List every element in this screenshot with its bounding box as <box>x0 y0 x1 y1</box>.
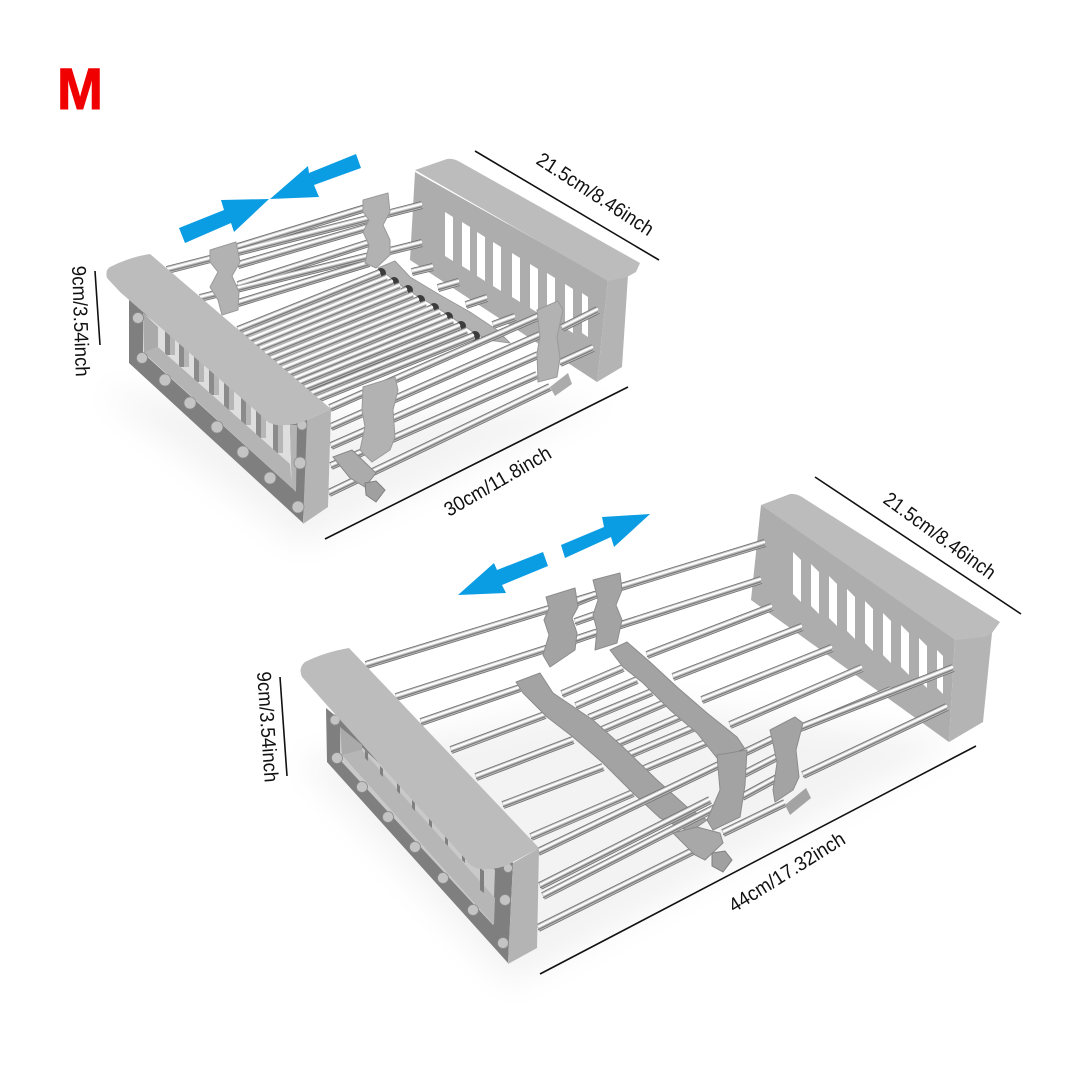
shadow under extended basket <box>300 700 960 985</box>
dimension: bottom height: 9cm/3.54inch <box>252 671 282 783</box>
rod stub <box>785 788 811 815</box>
dimension: top width <box>475 149 659 260</box>
back clips <box>543 573 622 667</box>
front clip <box>770 717 803 802</box>
inner rods <box>562 667 708 771</box>
band front drop <box>707 750 747 830</box>
back rods <box>366 542 891 839</box>
compress arrow left (top) <box>270 154 361 199</box>
dimension: bottom width <box>815 477 1021 614</box>
middle rods <box>238 272 474 401</box>
front clips <box>360 301 563 462</box>
near end plate <box>106 254 331 524</box>
dimension: bottom width: 21.5cm/8.46inch <box>879 488 1000 584</box>
bottom basket extended <box>300 494 1000 985</box>
dimension: top height: 9cm/3.54inch <box>67 265 93 377</box>
front rods <box>329 309 598 495</box>
expand arrow right (bottom) <box>561 514 650 558</box>
centre clip band <box>378 261 510 343</box>
top basket compact <box>100 159 640 545</box>
front rods <box>538 667 953 930</box>
stub end <box>550 373 572 396</box>
back clips <box>210 193 390 315</box>
dimension: bottom length <box>540 746 976 974</box>
dimension: top width: 21.5cm/8.46inch <box>532 149 657 241</box>
expand arrow left (bottom) <box>458 552 548 595</box>
lock knob <box>673 827 732 872</box>
shadow under compact basket <box>100 390 610 545</box>
compress arrow right (top) <box>179 199 269 243</box>
near end plate <box>301 648 539 964</box>
far end plate <box>751 494 1000 742</box>
lock knob <box>333 450 385 502</box>
dimension: top length: 30cm/11.8inch <box>440 442 555 521</box>
back rods <box>167 204 515 327</box>
clip bands <box>516 642 747 832</box>
rod end caps <box>376 268 480 341</box>
dimension: bottom length: 44cm/17.32inch <box>725 828 849 917</box>
size label M: M <box>57 57 103 122</box>
dimension: top length <box>325 387 628 539</box>
far end plate <box>410 159 640 382</box>
